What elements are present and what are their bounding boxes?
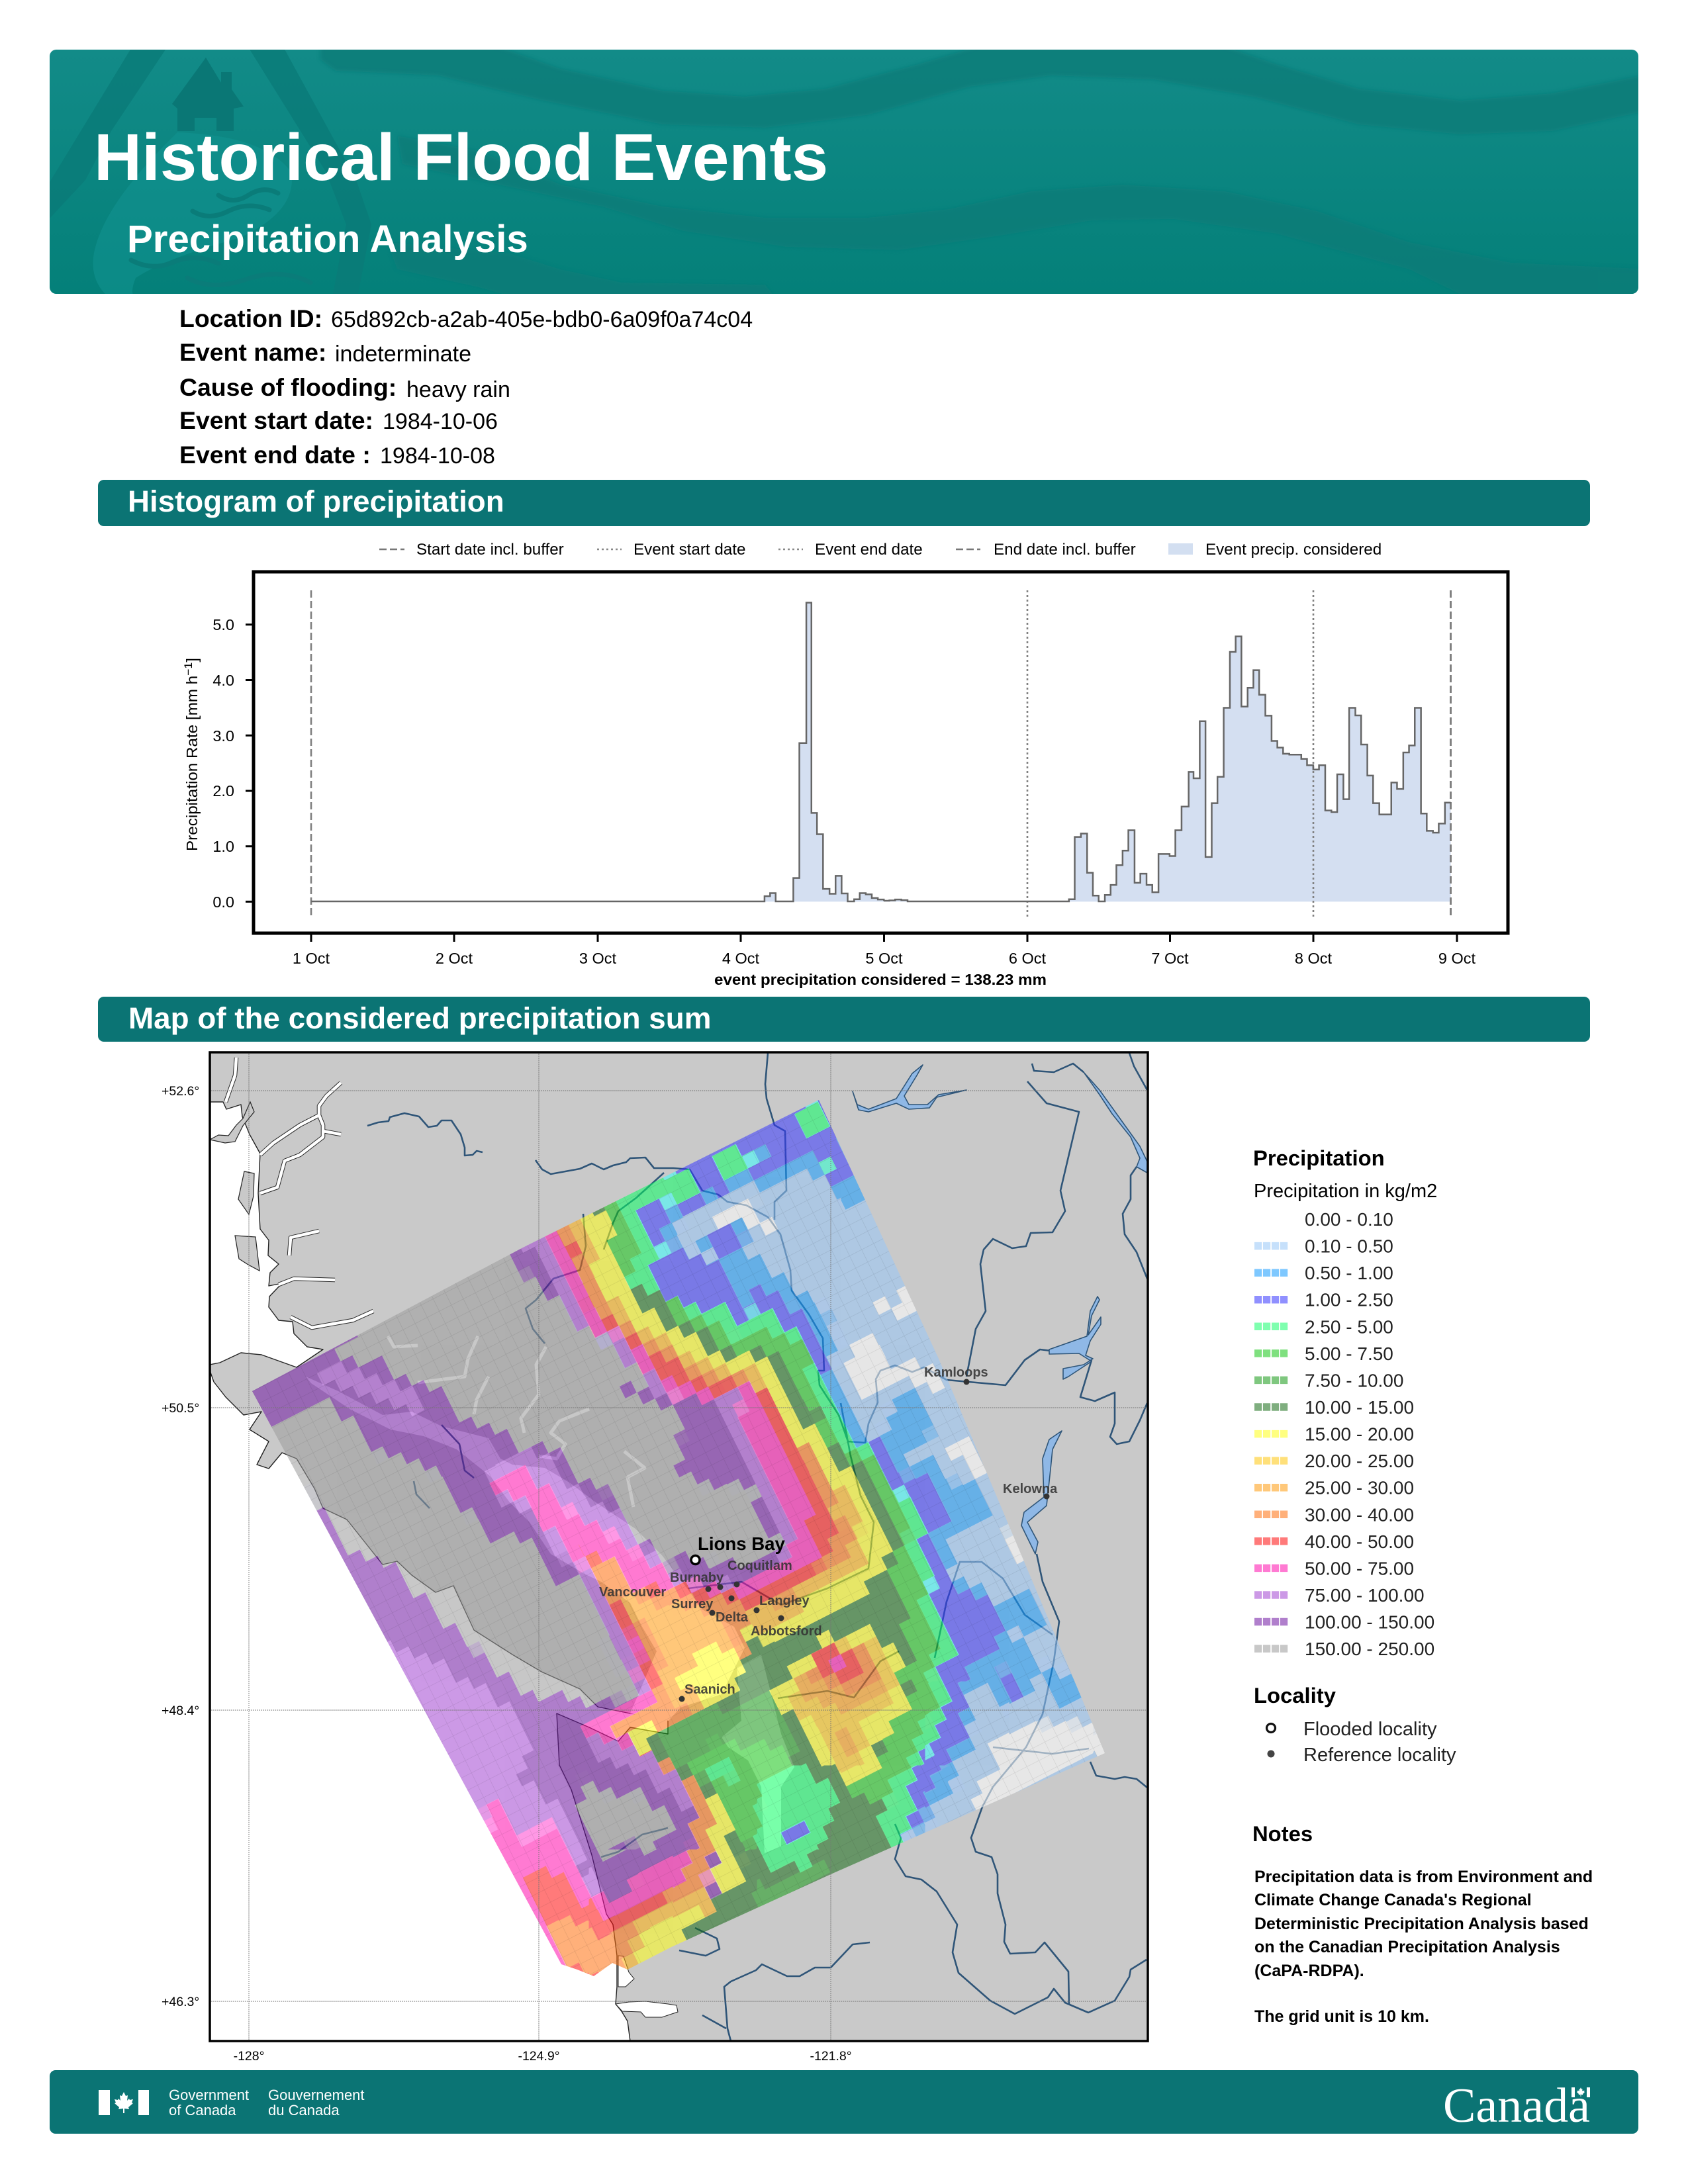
histogram legend: Event precip. considered xyxy=(1205,541,1382,559)
locality labels xyxy=(599,1365,1058,1697)
map legend: precipitation: 150.00 - 250.00 xyxy=(1305,1639,1434,1659)
class 40.00-50.00 xyxy=(234,1191,835,2050)
locality labels: Lions Bay xyxy=(698,1533,786,1554)
class 75.00-100.00 xyxy=(234,1191,794,2050)
histogram legend: Event start date xyxy=(633,541,745,559)
precipitation step line xyxy=(311,603,1451,901)
y axis tick labels: 5.0 xyxy=(212,616,234,633)
y axis tick labels: 3.0 xyxy=(212,727,234,745)
locality labels: Abbotsford xyxy=(751,1624,822,1639)
locality labels: Langley xyxy=(759,1594,810,1608)
class 5.00-7.50 xyxy=(234,1178,943,2050)
notes: on the Canadian Precipitation Analysis xyxy=(1254,1938,1560,1956)
y axis title: −1 xyxy=(182,662,195,676)
rivers xyxy=(367,1053,1147,2041)
subtitle: Precipitation Analysis xyxy=(127,218,528,261)
map legend: precipitation: Precipitation xyxy=(1253,1146,1385,1170)
map legend: precipitation: 20.00 - 25.00 xyxy=(1305,1451,1414,1471)
map legend: precipitation: 15.00 - 20.00 xyxy=(1305,1424,1414,1445)
event details block: 1984-10-06 xyxy=(383,409,498,434)
y axis tick labels xyxy=(212,616,234,911)
footer banner xyxy=(50,2070,1638,2134)
class 1.00-2.50 xyxy=(234,1059,1023,2050)
event precipitation fill xyxy=(765,603,1451,901)
lakes xyxy=(853,1065,1147,1554)
latitude labels: +50.5° xyxy=(162,1401,199,1416)
map frame xyxy=(210,1052,1148,2041)
event details block: heavy rain xyxy=(406,377,510,402)
canada wordmark: Canada xyxy=(1443,2079,1590,2133)
histogram legend: End date incl. buffer xyxy=(994,541,1136,559)
map legend: precipitation: 25.00 - 30.00 xyxy=(1305,1478,1414,1498)
locality labels: Kamloops xyxy=(924,1365,988,1380)
event details block: 65d892cb-a2ab-405e-bdb0-6a09f0a74c04 xyxy=(331,307,753,332)
map legend: precipitation: 50.00 - 75.00 xyxy=(1305,1558,1414,1578)
longitude labels: -121.8° xyxy=(810,2049,852,2064)
header banner xyxy=(40,40,1655,304)
class 0.50-1.00 xyxy=(659,1138,1082,1837)
y axis tick labels: 4.0 xyxy=(212,672,234,689)
map legend: precipitation: 40.00 - 50.00 xyxy=(1305,1531,1414,1552)
precipitation grid cells xyxy=(252,1100,1105,1976)
class 25.00-30.00 xyxy=(234,1185,865,2050)
x axis tick labels: 2 Oct xyxy=(436,950,473,967)
x axis tick labels: 6 Oct xyxy=(1009,950,1047,967)
x axis tick labels: 1 Oct xyxy=(293,950,330,967)
event details block: Event name: xyxy=(179,338,326,366)
government wordmark: of Canada xyxy=(169,2102,236,2118)
map legend: precipitation: 0.00 - 0.10 xyxy=(1305,1209,1393,1230)
y axis title: Precipitation Rate [mm h xyxy=(183,681,201,851)
event details block: Event end date : xyxy=(179,441,371,469)
longitude labels: -128° xyxy=(234,2049,264,2064)
event details block: Cause of flooding: xyxy=(179,373,397,401)
map legend: precipitation: 100.00 - 150.00 xyxy=(1305,1612,1434,1632)
event details block xyxy=(179,304,753,469)
map legend: precipitation: 75.00 - 100.00 xyxy=(1305,1585,1425,1606)
locality labels: Saanich xyxy=(684,1682,735,1697)
grid cell lines xyxy=(252,1100,1105,1976)
notes: Deterministic Precipitation Analysis based xyxy=(1254,1915,1589,1933)
western and central overlays traced on map crop xyxy=(273,1242,910,1998)
locality labels: Burnaby xyxy=(670,1570,724,1585)
base map land and water xyxy=(210,1052,1148,2041)
longitude labels xyxy=(234,2049,852,2064)
section heading: histogram: Histogram of precipitation xyxy=(128,484,504,518)
class 0.10-0.50 base xyxy=(672,1169,1098,1843)
date markers xyxy=(311,590,1451,917)
class 50.00-75.00 xyxy=(234,1191,821,2050)
graticule xyxy=(211,1054,1147,2040)
map legend: precipitation: 2.50 - 5.00 xyxy=(1305,1316,1393,1337)
y axis tick labels: 1.0 xyxy=(212,838,234,855)
section heading: histogram xyxy=(98,480,1590,526)
locality labels: Surrey xyxy=(671,1597,714,1612)
map legend: precipitation: 1.00 - 2.50 xyxy=(1305,1290,1393,1310)
notes: Climate Change Canada's Regional xyxy=(1254,1891,1532,1909)
x axis tick labels: 7 Oct xyxy=(1151,950,1189,967)
class 100.00-150.00 xyxy=(234,1191,784,2050)
latitude labels: +52.6° xyxy=(162,1084,199,1099)
map legend: precipitation: Precipitation in kg/m2 xyxy=(1254,1181,1437,1202)
event details block: 1984-10-08 xyxy=(380,443,495,469)
event total caption: event precipitation considered = 138.23 mm xyxy=(714,971,1047,988)
notes: Precipitation data is from Environment and xyxy=(1254,1868,1593,1886)
class 30.00-40.00 xyxy=(234,1185,853,2050)
y axis title: ] xyxy=(183,658,201,662)
map legend: precipitation: 30.00 - 40.00 xyxy=(1305,1504,1414,1525)
longitude labels: -124.9° xyxy=(518,2049,560,2064)
map legend: precipitation xyxy=(1253,1146,1437,1659)
latitude labels: +46.3° xyxy=(162,1995,199,2009)
x axis tick labels: 9 Oct xyxy=(1438,950,1476,967)
latitude labels xyxy=(162,1084,199,2009)
southern low precipitation zone xyxy=(649,1579,910,1954)
histogram chart xyxy=(182,572,1508,988)
histogram legend: Start date incl. buffer xyxy=(416,541,564,559)
map legend: precipitation: 7.50 - 10.00 xyxy=(1305,1370,1403,1390)
map legend: locality xyxy=(1254,1683,1456,1766)
event details block: Event start date: xyxy=(179,406,373,434)
axis ticks xyxy=(246,625,1457,942)
fjords xyxy=(226,1058,373,1328)
class 2.50-5.00 xyxy=(234,1092,959,2050)
government wordmark: du Canada xyxy=(268,2102,340,2118)
icon: government flag xyxy=(99,2090,149,2115)
event details block: Location ID: xyxy=(179,304,322,332)
y axis tick labels: 0.0 xyxy=(212,893,234,911)
notes xyxy=(1252,1821,1593,2026)
locality labels: Coquitlam xyxy=(727,1559,792,1573)
section heading: map: Map of the considered precipitation sum xyxy=(128,1001,711,1035)
class 15.00-20.00 xyxy=(234,1185,890,2050)
notes: The grid unit is 10 km. xyxy=(1254,2007,1429,2026)
x axis tick labels: 4 Oct xyxy=(722,950,760,967)
map legend: precipitation: 0.10 - 0.50 xyxy=(1305,1236,1393,1257)
government wordmark xyxy=(169,2087,365,2118)
locality markers xyxy=(679,1379,1050,1702)
locality labels: Delta xyxy=(716,1610,749,1625)
map legend: locality: Reference locality xyxy=(1303,1745,1456,1766)
class 10.00-15.00 xyxy=(234,1185,902,2050)
histogram legend: Event end date xyxy=(815,541,923,559)
strait water xyxy=(306,1377,745,1721)
coastal inlets xyxy=(616,1956,678,2017)
locality labels: Kelowna xyxy=(1003,1482,1058,1496)
government wordmark: Government xyxy=(169,2087,249,2103)
map legend: precipitation: 0.50 - 1.00 xyxy=(1305,1263,1393,1283)
title: Historical Flood Events xyxy=(94,121,828,195)
x axis tick labels: 8 Oct xyxy=(1295,950,1333,967)
histogram legend xyxy=(379,541,1382,559)
government wordmark: Gouvernement xyxy=(268,2087,365,2103)
eastern rainfall blob xyxy=(775,1629,910,1784)
map legend: precipitation: 5.00 - 7.50 xyxy=(1305,1343,1393,1364)
flooded locality marker xyxy=(691,1555,700,1565)
x axis tick labels: 5 Oct xyxy=(865,950,903,967)
x axis tick labels xyxy=(293,950,1476,967)
y axis tick labels: 2.0 xyxy=(212,782,234,799)
latitude labels: +48.4° xyxy=(162,1704,199,1718)
map legend: locality: Locality xyxy=(1254,1683,1336,1707)
section heading: map xyxy=(98,997,1590,1042)
map legend: locality: Flooded locality xyxy=(1303,1719,1437,1740)
map legend: precipitation: 10.00 - 15.00 xyxy=(1305,1397,1414,1418)
x axis tick labels: 3 Oct xyxy=(579,950,617,967)
chart frame xyxy=(254,572,1508,933)
event details block: indeterminate xyxy=(335,341,471,367)
notes: Notes xyxy=(1252,1821,1313,1846)
notes: (CaPA-RDPA). xyxy=(1254,1962,1364,1980)
locality labels: Vancouver xyxy=(599,1585,666,1600)
